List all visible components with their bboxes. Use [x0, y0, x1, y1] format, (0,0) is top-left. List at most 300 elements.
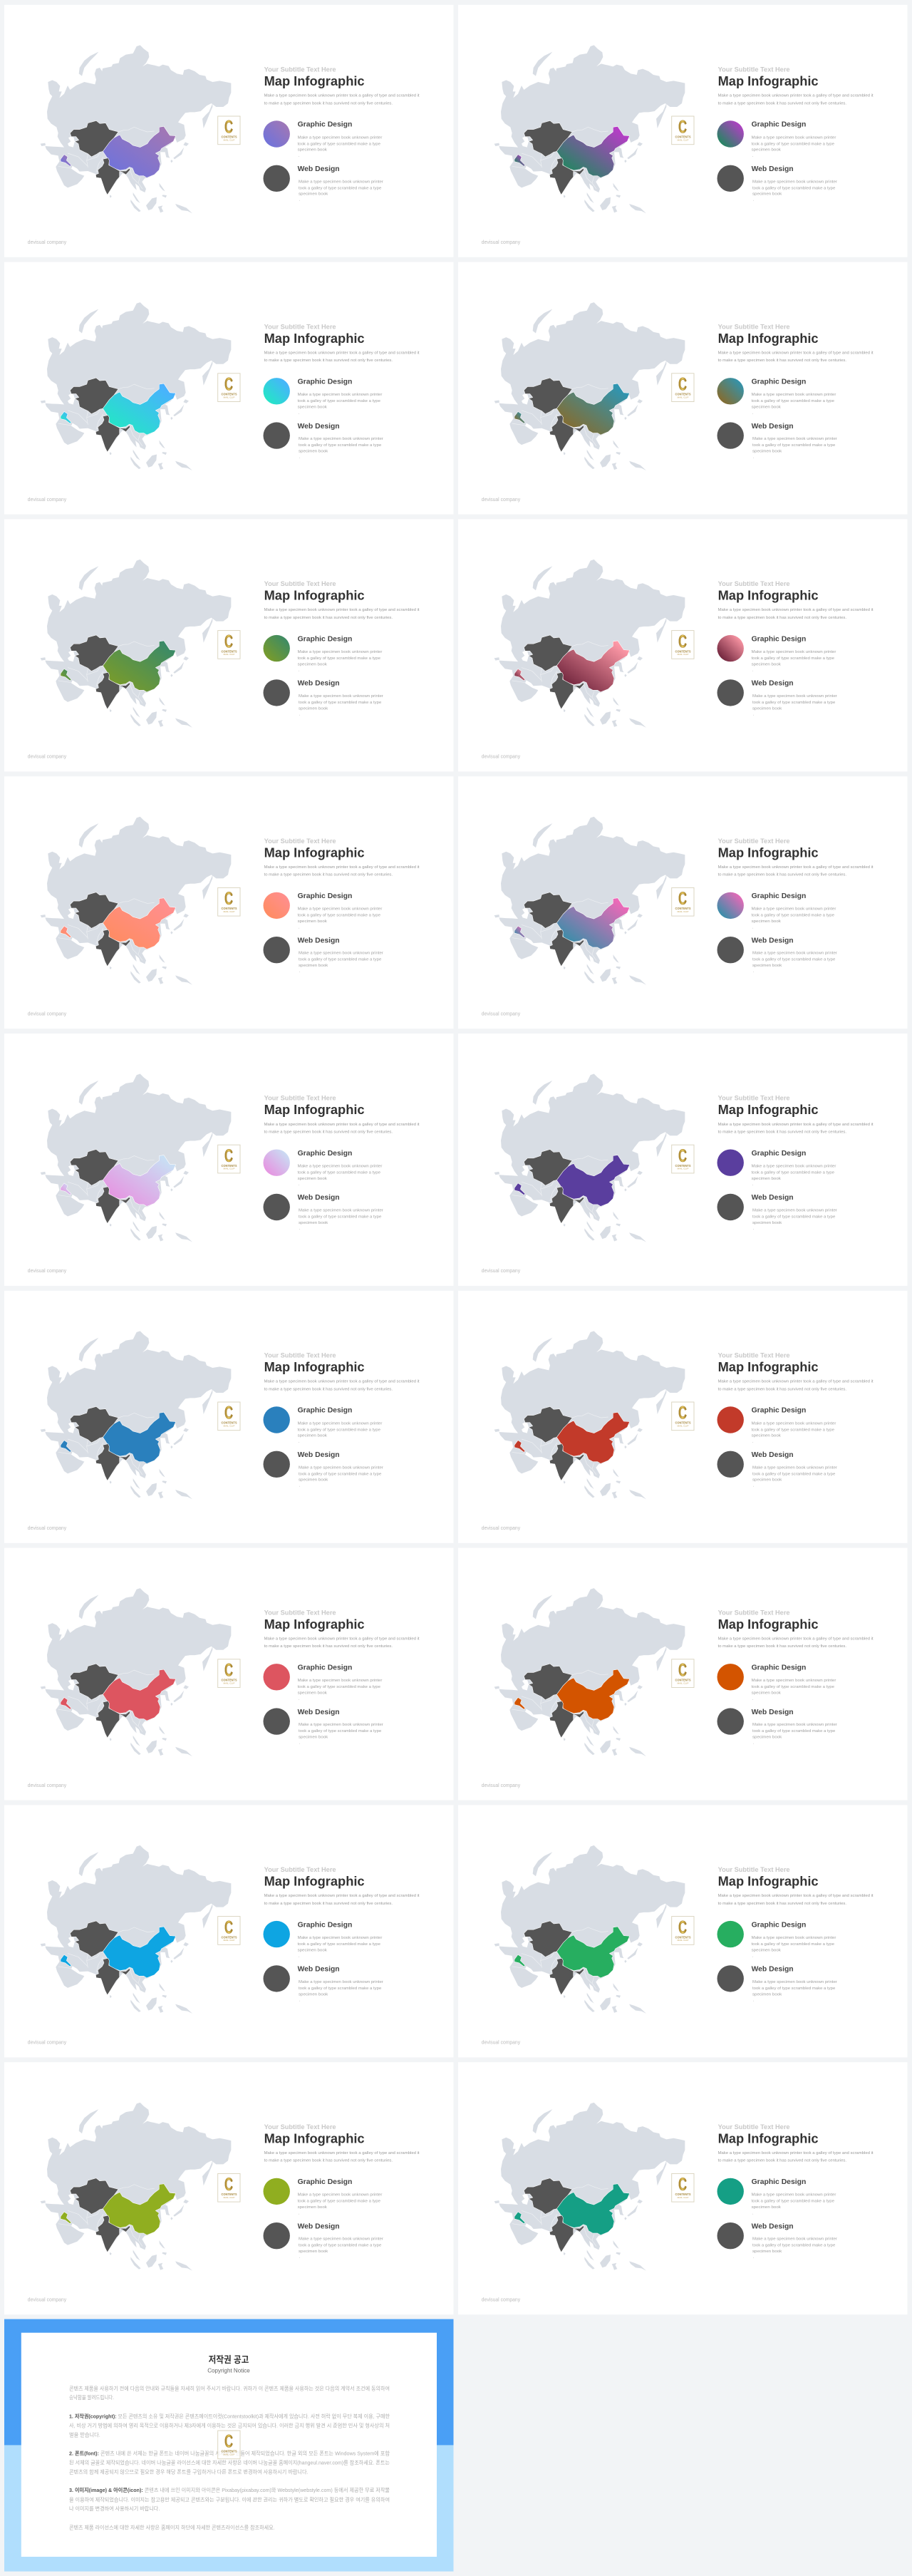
web design item: Web Design: [752, 1451, 794, 1459]
web design item: took a galley of type scrambled make a type: [299, 443, 381, 448]
section 2: font: 된 서체의 글꼴로 제작되었습니다. 네이버 나눔글꼴 라이선스에 대한 자세한 사항은 네이버 나눔글꼴 홈페이지(hangeul.naver.com)를 참조하세요. 폰트는: [69, 2459, 390, 2466]
web design item: .: [752, 198, 754, 202]
description: Make a type specimen book unknown printer took a galley of type and scrambled it: [264, 2151, 420, 2155]
description: to make a type specimen book it has survived not only five centuries.: [264, 873, 393, 877]
map of Asia: [494, 302, 685, 470]
logo badge: [218, 887, 240, 916]
logo badge: CONTENTS: [675, 1421, 691, 1425]
logo badge: C: [224, 1146, 233, 1166]
graphic design item: .: [299, 154, 300, 158]
logo badge: MAIL CLIP: [677, 1939, 689, 1942]
web design item: Web Design: [752, 1709, 794, 1716]
panel 7: salmon gradient: [4, 776, 453, 1029]
title: Map Infographic: [718, 1617, 819, 1632]
description: Make a type specimen book unknown printer took a galley of type and scrambled it: [264, 1637, 420, 1641]
logo badge: [218, 631, 240, 659]
description: to make a type specimen book it has survived not only five centuries.: [264, 1644, 393, 1649]
description: [264, 1637, 420, 1649]
graphic design item: took a galley of type scrambled make a type: [298, 656, 380, 661]
title: Map Infographic: [718, 74, 819, 88]
description: to make a type specimen book it has survived not only five centuries.: [718, 101, 847, 105]
graphic design item: Make a type specimen book unknown printer: [752, 1936, 836, 1940]
description: to make a type specimen book it has survived not only five centuries.: [718, 873, 847, 877]
map of Asia: [494, 1588, 685, 1756]
web design item: Make a type specimen book unknown printer: [752, 180, 837, 184]
web design item: Make a type specimen book unknown printer: [752, 437, 837, 441]
web design item: .: [299, 712, 301, 716]
graphic design item: took a galley of type scrambled make a type: [298, 914, 380, 918]
logo badge: CONTENTS: [675, 1679, 691, 1682]
map of Asia: [494, 1331, 685, 1499]
description: Make a type specimen book unknown printer took a galley of type and scrambled it: [718, 1380, 874, 1384]
web design item: .: [299, 1227, 301, 1231]
graphic design item: took a galley of type scrambled make a type: [298, 142, 380, 146]
graphic design item: .: [299, 1954, 300, 1959]
description: to make a type specimen book it has survived not only five centuries.: [718, 1387, 847, 1391]
map of Asia: [494, 560, 685, 728]
graphic design item: Make a type specimen book unknown printer: [298, 2193, 382, 2198]
logo badge: CONTENTS: [221, 135, 237, 139]
description: [264, 1123, 420, 1135]
circle: graphic design: [717, 635, 744, 661]
graphic design item: took a galley of type scrambled make a type: [752, 1942, 834, 1947]
graphic design item: Make a type specimen book unknown printer: [298, 907, 382, 912]
graphic design item: .: [752, 669, 754, 673]
graphic design item: [752, 1150, 836, 1187]
web design item: [752, 937, 837, 974]
title: Map Infographic: [718, 1875, 819, 1889]
description: [264, 351, 420, 363]
graphic design item: [752, 1407, 836, 1444]
title: Map Infographic: [264, 845, 365, 860]
footer: devisual company: [28, 2041, 67, 2046]
description: Make a type specimen book unknown printer took a galley of type and scrambled it: [718, 1894, 874, 1898]
description: Make a type specimen book unknown printer took a galley of type and scrambled it: [718, 351, 874, 355]
circle: graphic design: [717, 120, 744, 148]
map of Asia: [41, 45, 231, 213]
logo badge: [672, 1659, 694, 1688]
web design item: Make a type specimen book unknown printer: [752, 2237, 837, 2242]
footer: devisual company: [482, 1783, 521, 1788]
circle: graphic design: [717, 2178, 744, 2205]
web design item: [298, 680, 383, 716]
web design item: specimen book: [752, 1992, 782, 1997]
description: [718, 94, 874, 105]
title: Map Infographic: [264, 1360, 365, 1374]
graphic design item: .: [752, 1183, 754, 1187]
footer: devisual company: [482, 2041, 521, 2046]
web design item: Make a type specimen book unknown printer: [299, 1980, 383, 1984]
web design item: .: [299, 1741, 301, 1746]
web design item: [752, 1966, 837, 2002]
map of Asia: [41, 817, 231, 985]
web design item: Make a type specimen book unknown printer: [299, 180, 383, 184]
subtitle: Your Subtitle Text Here: [718, 2123, 790, 2131]
circle: web design: [264, 1965, 290, 1992]
footer: devisual company: [482, 1526, 521, 1531]
logo badge: CONTENTS: [675, 649, 691, 653]
description: [718, 2151, 874, 2163]
circle: web design: [264, 422, 290, 449]
title: Map Infographic: [264, 1103, 365, 1117]
subtitle: Your Subtitle Text Here: [264, 838, 336, 845]
footer: devisual company: [482, 755, 521, 760]
web design item: specimen book: [299, 706, 328, 711]
web design item: took a galley of type scrambled make a type: [752, 1729, 835, 1733]
web design item: took a galley of type scrambled make a type: [299, 1729, 381, 1733]
logo badge: CONTENTS: [675, 392, 691, 396]
footer: devisual company: [28, 498, 67, 503]
graphic design item: [298, 635, 382, 673]
logo badge: CONTENTS: [675, 1164, 691, 1168]
web design item: specimen book: [752, 706, 782, 711]
description: to make a type specimen book it has survived not only five centuries.: [718, 616, 847, 620]
web design item: specimen book: [752, 449, 782, 453]
web design item: specimen book: [752, 1221, 782, 1225]
graphic design item: .: [752, 1697, 754, 1701]
title: Map Infographic: [264, 74, 365, 88]
graphic design item: specimen book: [752, 405, 781, 409]
footer: devisual company: [28, 1783, 67, 1788]
web design item: took a galley of type scrambled make a type: [299, 701, 381, 705]
logo badge: [672, 116, 694, 145]
graphic design item: Make a type specimen book unknown printer: [752, 907, 836, 912]
web design item: [298, 1451, 383, 1488]
panel 17: olive: [4, 2062, 453, 2314]
circle: graphic design: [717, 1406, 744, 1433]
panel 1: purple gradient: [4, 5, 453, 257]
web design item: Make a type specimen book unknown printer: [299, 2237, 383, 2242]
copyright heading: 저작권 공고: [209, 2354, 249, 2365]
circle: web design: [717, 165, 744, 192]
logo badge: CONTENTS: [221, 2450, 237, 2453]
graphic design item: .: [299, 1440, 300, 1444]
logo badge: CONTENTS: [221, 1679, 237, 1682]
intro text: 승낙함을 알려드립니다.: [69, 2394, 114, 2401]
web design item: took a galley of type scrambled make a type: [752, 1987, 835, 1991]
circle: graphic design: [264, 1149, 290, 1176]
panel 9: lavender gradient: [4, 1034, 453, 1286]
web design item: Web Design: [298, 165, 340, 173]
logo badge: C: [224, 1403, 233, 1423]
description: [718, 1637, 874, 1649]
panel 18: teal: [458, 2062, 908, 2314]
logo badge: [218, 2431, 240, 2459]
graphic design item: took a galley of type scrambled make a type: [752, 1685, 834, 1689]
web design item: Make a type specimen book unknown printer: [299, 1465, 383, 1470]
web design item: Web Design: [752, 423, 794, 431]
logo badge: [218, 1145, 240, 1173]
logo badge: C: [678, 889, 687, 909]
web design item: [752, 1709, 837, 1745]
web design item: took a galley of type scrambled make a type: [752, 2244, 835, 2248]
graphic design item: specimen book: [752, 2205, 781, 2210]
description: to make a type specimen book it has survived not only five centuries.: [718, 1902, 847, 1906]
web design item: Web Design: [298, 680, 340, 688]
web design item: specimen book: [752, 1736, 782, 1740]
graphic design item: specimen book: [752, 148, 781, 153]
web design item: [298, 423, 383, 459]
logo badge: MAIL CLIP: [224, 1939, 235, 1942]
logo badge: MAIL CLIP: [677, 1682, 689, 1684]
map of Asia: [41, 2103, 231, 2271]
logo badge: CONTENTS: [221, 649, 237, 653]
web design item: took a galley of type scrambled make a type: [299, 1215, 381, 1219]
web design item: Web Design: [298, 937, 340, 944]
logo badge: [672, 1145, 694, 1173]
graphic design item: Graphic Design: [752, 1407, 806, 1415]
logo badge: [672, 1917, 694, 1944]
graphic design item: .: [299, 1183, 300, 1187]
graphic design item: took a galley of type scrambled make a type: [298, 2200, 380, 2204]
logo badge: MAIL CLIP: [224, 2197, 235, 2199]
logo badge: CONTENTS: [221, 907, 237, 910]
logo badge: MAIL CLIP: [677, 396, 689, 398]
logo badge: MAIL CLIP: [677, 1168, 689, 1170]
web design item: took a galley of type scrambled make a type: [752, 958, 835, 962]
web design item: [298, 1966, 383, 2002]
description: [264, 608, 420, 620]
logo badge: CONTENTS: [221, 392, 237, 396]
graphic design item: .: [299, 411, 300, 416]
graphic design item: specimen book: [298, 405, 327, 409]
description: [264, 865, 420, 877]
graphic design item: took a galley of type scrambled make a type: [752, 914, 834, 918]
logo badge: C: [678, 1917, 687, 1937]
logo badge: C: [678, 1661, 687, 1681]
section 1: copyright: 사, 비상 거기 방법에 의하여 영리 목적으로 이용하거나 제3자에게 이용하는 것은 금지되어 있습니다. 이러한 금지 행위 발견 시 준엄한 민사 및 형사상의 처: [69, 2422, 390, 2428]
logo badge: C: [224, 889, 233, 909]
footer: devisual company: [482, 1269, 521, 1274]
graphic design item: Graphic Design: [298, 1407, 352, 1415]
web design item: Make a type specimen book unknown printer: [299, 952, 383, 956]
logo badge: C: [678, 1403, 687, 1423]
circle: web design: [717, 937, 744, 963]
description: [264, 94, 420, 105]
logo badge: CONTENTS: [675, 907, 691, 910]
footer: devisual company: [28, 2297, 67, 2302]
web design item: Make a type specimen book unknown printer: [752, 1723, 837, 1727]
web design item: Make a type specimen book unknown printer: [752, 1980, 837, 1984]
logo badge: MAIL CLIP: [224, 2453, 235, 2456]
panel 2: green-magenta gradient: [458, 5, 908, 257]
web design item: Web Design: [298, 1966, 340, 1974]
circle: web design: [717, 1194, 744, 1220]
circle: web design: [264, 2222, 290, 2249]
logo badge: MAIL CLIP: [224, 140, 235, 141]
logo badge: [672, 887, 694, 916]
graphic design item: Make a type specimen book unknown printer: [752, 1679, 836, 1683]
title: Map Infographic: [718, 845, 819, 860]
circle: web design: [717, 2222, 744, 2249]
panel 16: green: [458, 1805, 908, 2057]
graphic design item: Make a type specimen book unknown printer: [752, 1421, 836, 1426]
graphic design item: specimen book: [752, 662, 781, 666]
subtitle: Your Subtitle Text Here: [264, 580, 336, 587]
graphic design item: Graphic Design: [752, 1150, 806, 1158]
circle: graphic design: [264, 1406, 290, 1433]
logo badge: [218, 2173, 240, 2202]
web design item: took a galley of type scrambled make a type: [752, 443, 835, 448]
web design item: took a galley of type scrambled make a type: [299, 958, 381, 962]
graphic design item: specimen book: [298, 1691, 327, 1696]
section 1: copyright: 벌을 받습니다.: [69, 2432, 100, 2438]
description: [718, 351, 874, 363]
web design item: specimen book: [299, 1478, 328, 1483]
description: Make a type specimen book unknown printer took a galley of type and scrambled it: [264, 1123, 420, 1127]
footer: devisual company: [28, 1526, 67, 1531]
panel 11: blue: [4, 1291, 453, 1543]
graphic design item: .: [299, 1697, 300, 1701]
graphic design item: Make a type specimen book unknown printer: [298, 650, 382, 654]
graphic design item: specimen book: [752, 1948, 781, 1952]
logo badge: CONTENTS: [221, 2193, 237, 2196]
web design item: specimen book: [299, 449, 328, 453]
description: [718, 1380, 874, 1391]
description: Make a type specimen book unknown printer took a galley of type and scrambled it: [264, 608, 420, 612]
graphic design item: [298, 892, 382, 929]
description: Make a type specimen book unknown printer took a galley of type and scrambled it: [264, 865, 420, 870]
title: Map Infographic: [264, 1875, 365, 1889]
web design item: Make a type specimen book unknown printer: [299, 1208, 383, 1212]
logo badge: C: [224, 632, 233, 651]
graphic design item: .: [752, 2211, 754, 2215]
map of Asia: [494, 2103, 685, 2271]
web design item: .: [752, 969, 754, 974]
web design item: specimen book: [752, 964, 782, 968]
circle: graphic design: [264, 2178, 290, 2205]
logo badge: C: [678, 374, 687, 394]
section 3: image and icon: [69, 2487, 390, 2512]
description: [718, 1894, 874, 1906]
logo badge: C: [224, 2175, 233, 2195]
circle: web design: [264, 1194, 290, 1220]
web design item: Web Design: [298, 1709, 340, 1716]
web design item: Web Design: [752, 1966, 794, 1974]
description: [264, 2151, 420, 2163]
web design item: .: [299, 2255, 301, 2260]
graphic design item: specimen book: [752, 919, 781, 924]
graphic design item: took a galley of type scrambled make a type: [752, 1170, 834, 1175]
web design item: [752, 423, 837, 459]
logo badge: [218, 1659, 240, 1688]
graphic design item: Graphic Design: [752, 2178, 806, 2186]
graphic design item: took a galley of type scrambled make a type: [298, 1428, 380, 1432]
graphic design item: Graphic Design: [752, 121, 806, 129]
section 1: copyright: [69, 2413, 390, 2438]
title: Map Infographic: [718, 1360, 819, 1374]
graphic design item: [752, 892, 836, 929]
logo badge: C: [224, 374, 233, 394]
section 2: font: 콘텐츠의 함께 제공되지 않으므로 필요한 경우 해당 폰트를 구입하거나 다른 폰트로 변경하여 사용하시기 바랍니다.: [69, 2468, 308, 2475]
description: Make a type specimen book unknown printer took a galley of type and scrambled it: [718, 1123, 874, 1127]
circle: web design: [264, 937, 290, 963]
graphic design item: Make a type specimen book unknown printer: [752, 1164, 836, 1168]
map of Asia: [494, 45, 685, 213]
title: Map Infographic: [264, 589, 365, 603]
graphic design item: Graphic Design: [298, 2178, 352, 2186]
logo badge: C: [224, 1661, 233, 1681]
graphic design item: Make a type specimen book unknown printer: [752, 650, 836, 654]
description: to make a type specimen book it has survived not only five centuries.: [718, 1644, 847, 1649]
footer: devisual company: [482, 498, 521, 503]
logo badge: C: [224, 1917, 233, 1937]
logo badge: MAIL CLIP: [224, 1682, 235, 1684]
description: Make a type specimen book unknown printer took a galley of type and scrambled it: [718, 94, 874, 98]
subtitle: Your Subtitle Text Here: [264, 323, 336, 330]
description: [718, 1123, 874, 1135]
description: Make a type specimen book unknown printer took a galley of type and scrambled it: [718, 1637, 874, 1641]
web design item: Web Design: [298, 1451, 340, 1459]
graphic design item: .: [752, 154, 754, 158]
web design item: .: [299, 1998, 301, 2002]
panel 15: sky blue: [4, 1805, 453, 2057]
description: Make a type specimen book unknown printer took a galley of type and scrambled it: [718, 608, 874, 612]
web design item: Web Design: [752, 680, 794, 688]
circle: web design: [717, 679, 744, 706]
web design item: [752, 1194, 837, 1231]
circle: web design: [717, 422, 744, 449]
section 3: image and icon: 3. 이미지(image) & 아이콘(icon): 콘텐츠 내에 쓰인 이미지와 아이콘은 Pixabay(pixabay.com)와 Webstyle(webstyle.com) 등에서 제공한 무료 저작물: [69, 2487, 390, 2493]
map of Asia: [41, 302, 231, 470]
logo badge: MAIL CLIP: [677, 911, 689, 913]
description: to make a type specimen book it has survived not only five centuries.: [264, 1387, 393, 1391]
web design item: specimen book: [299, 964, 328, 968]
web design item: specimen book: [752, 1478, 782, 1483]
circle: graphic design: [264, 635, 290, 661]
subtitle: Your Subtitle Text Here: [718, 1095, 790, 1102]
graphic design item: specimen book: [298, 662, 327, 666]
web design item: [752, 165, 837, 202]
graphic design item: Make a type specimen book unknown printer: [752, 393, 836, 397]
circle: web design: [717, 1451, 744, 1478]
description: [718, 865, 874, 877]
web design item: Make a type specimen book unknown printer: [752, 694, 837, 699]
intro text: 콘텐츠 제품을 사용하기 전에 다음의 안내와 규칙들을 자세히 읽어 주시기 바랍니다. 귀하가 이 콘텐츠 제품을 사용하는 것은 다음의 계약서 조건에 동의하여: [69, 2385, 390, 2391]
footer: devisual company: [28, 1269, 67, 1274]
graphic design item: Graphic Design: [752, 892, 806, 900]
title: Map Infographic: [718, 331, 819, 346]
web design item: took a galley of type scrambled make a type: [299, 1472, 381, 1476]
logo badge: MAIL CLIP: [677, 1426, 689, 1427]
logo badge: [672, 373, 694, 402]
web design item: .: [299, 1484, 301, 1488]
web design item: .: [752, 1484, 754, 1488]
graphic design item: Graphic Design: [298, 121, 352, 129]
panel: copyright notice: [4, 2319, 453, 2572]
graphic design item: .: [299, 669, 300, 673]
circle: web design: [264, 679, 290, 706]
graphic design item: [298, 1150, 382, 1187]
subtitle: Your Subtitle Text Here: [718, 838, 790, 845]
graphic design item: took a galley of type scrambled make a type: [298, 399, 380, 403]
web design item: Web Design: [298, 423, 340, 431]
web design item: [298, 937, 383, 974]
graphic design item: [752, 2178, 836, 2215]
description: Make a type specimen book unknown printer took a galley of type and scrambled it: [718, 2151, 874, 2155]
section 3: image and icon: 을 이용하여 제작되었습니다. 이미지는 참고용만 제공되고 콘텐츠와는 구분됩니다. 이에 관한 권리는 귀하가 별도로 확인하고 필요한 경우 여기를 유의하여: [69, 2496, 390, 2503]
description: to make a type specimen book it has survived not only five centuries.: [718, 2159, 847, 2163]
description: [718, 608, 874, 620]
web design item: [298, 1194, 383, 1231]
web design item: took a galley of type scrambled make a type: [752, 701, 835, 705]
logo badge: CONTENTS: [221, 1164, 237, 1168]
panel 12: red: [458, 1291, 908, 1543]
graphic design item: specimen book: [298, 1434, 327, 1438]
graphic design item: took a galley of type scrambled make a type: [752, 399, 834, 403]
logo badge: MAIL CLIP: [677, 654, 689, 656]
circle: web design: [264, 1451, 290, 1478]
